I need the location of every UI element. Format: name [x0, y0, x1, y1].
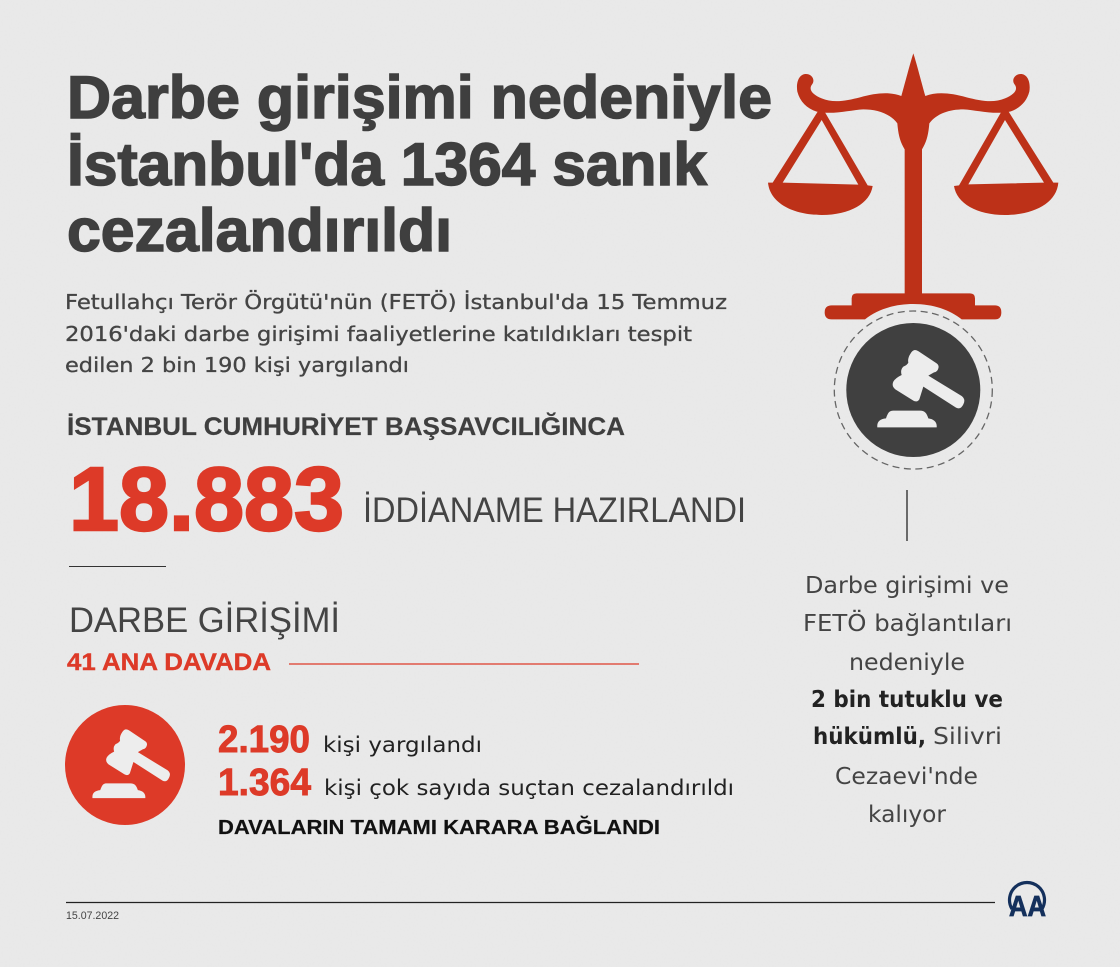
side note: Silivri prison: hükümlü, [813, 724, 926, 750]
sub-heading: 41 main cases: 41 ANA DAVADA [67, 649, 271, 676]
stat: sentenced [218, 762, 734, 804]
intro paragraph: 2016'daki darbe girişimi faaliyetlerine katıldıkları tespit [65, 322, 692, 346]
side note: Silivri prison: Silivri [933, 724, 1002, 750]
date: 15.07.2022 [66, 910, 119, 922]
stat: sentenced: kişi çok sayıda suçtan cezalandırıldı [324, 776, 734, 800]
side note: Silivri prison: kalıyor [868, 802, 947, 828]
side note: Silivri prison: 2 bin tutuklu ve [811, 687, 1003, 713]
icon: scales of justice [768, 53, 1058, 319]
stat: tried [218, 719, 482, 761]
stat: tried: 2.190 [218, 719, 310, 761]
icon: dark gavel in dashed circle [834, 311, 992, 469]
intro paragraph: Fetullahçı Terör Örgütü'nün (FETÖ) İstanbul'da 15 Temmuz [65, 289, 727, 314]
title: Darbe girişimi nedeniyle [67, 64, 772, 131]
icon: red gavel [65, 705, 185, 825]
side note: Silivri prison [803, 573, 1012, 828]
stat: tried: kişi yargılandı [323, 733, 482, 757]
stat: sentenced: 1.364 [218, 762, 311, 804]
title: İstanbul'da 1364 sanık [67, 131, 708, 198]
logo: AA: AA [1009, 891, 1046, 923]
big number: indictments: 18.883 [69, 450, 344, 550]
statistics [218, 719, 734, 839]
title [67, 64, 772, 264]
statement: all cases decided: DAVALARIN TAMAMI KARARA BAĞLANDI [218, 815, 660, 839]
prosecutor heading: İSTANBUL CUMHURİYET BAŞSAVCILIĞINCA [67, 412, 625, 441]
side note: Silivri prison: Darbe girişimi ve [805, 573, 1009, 599]
intro paragraph [65, 289, 727, 377]
title: cezalandırıldı [67, 197, 452, 264]
indictments label: İDDİANAME HAZIRLANDI [363, 491, 746, 530]
side note: Silivri prison: nedeniyle [849, 650, 965, 676]
side note: Silivri prison: Cezaevi'nde [835, 764, 978, 790]
section heading: DARBE GİRİŞİMİ [69, 601, 340, 640]
side note: Silivri prison: FETÖ bağlantıları [803, 609, 1012, 637]
intro paragraph: edilen 2 bin 190 kişi yargılandı [65, 353, 409, 377]
